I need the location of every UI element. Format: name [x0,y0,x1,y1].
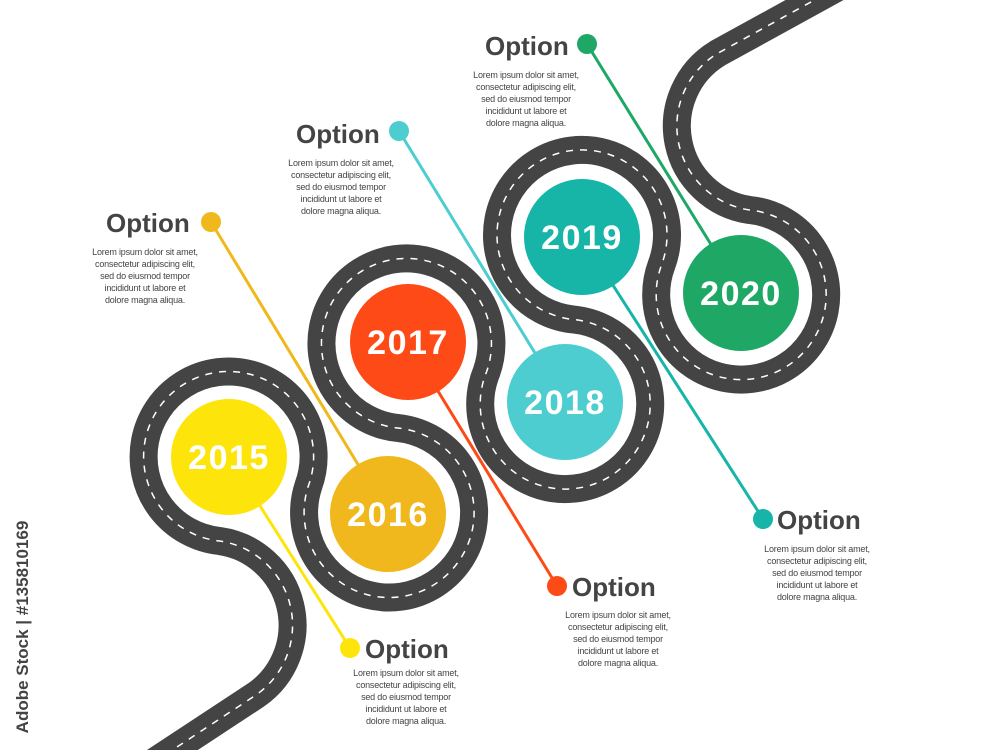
option 2018: dolore magna aliqua. [301,206,381,216]
option 2017: incididunt ut labore et [578,646,659,656]
option 2019: dolore magna aliqua. [777,592,857,602]
option 2019: sed do eiusmod tempor [772,568,862,578]
option 2015: consectetur adipiscing elit, [356,680,456,690]
option 2016: Option [106,208,190,238]
option 2015: incididunt ut labore et [366,704,447,714]
option 2016: Lorem ipsum dolor sit amet, [92,247,198,257]
circle 2020 [683,235,799,351]
option 2018 [288,119,409,216]
option 2020: consectetur adipiscing elit, [476,82,576,92]
option 2020: Option [485,31,569,61]
circle 2018 [507,344,623,460]
option 2015 [340,634,459,726]
option 2020: Lorem ipsum dolor sit amet, [473,70,579,80]
circle 2016 [330,456,446,572]
watermark id: Adobe Stock | #135810169 [13,521,32,733]
option 2018: consectetur adipiscing elit, [291,170,391,180]
circle 2015 [171,399,287,515]
circle 2016: 2016 [347,496,429,534]
option 2019 [753,505,870,602]
option 2019: consectetur adipiscing elit, [767,556,867,566]
circle 2017: 2017 [367,324,449,362]
circle 2018: 2018 [524,384,606,422]
option 2020: dolore magna aliqua. [486,118,566,128]
option 2016: consectetur adipiscing elit, [95,259,195,269]
circle 2017 [350,284,466,400]
circle 2019: 2019 [541,219,623,257]
option 2018: sed do eiusmod tempor [296,182,386,192]
option 2017 [547,572,671,668]
option 2015: sed do eiusmod tempor [361,692,451,702]
circle 2019 [524,179,640,295]
option 2015: dolore magna aliqua. [366,716,446,726]
option 2020 [473,31,597,128]
option 2019: Option [777,505,861,535]
circle 2015: 2015 [188,439,270,477]
option 2016: sed do eiusmod tempor [100,271,190,281]
option 2019: incididunt ut labore et [777,580,858,590]
option 2020: incididunt ut labore et [486,106,567,116]
connector lines [211,44,763,648]
option 2018: incididunt ut labore et [301,194,382,204]
road [142,0,860,750]
circle 2020: 2020 [700,275,782,313]
option 2018: Lorem ipsum dolor sit amet, [288,158,394,168]
option 2015: Option [365,634,449,664]
option 2019: Lorem ipsum dolor sit amet, [764,544,870,554]
option 2017: dolore magna aliqua. [578,658,658,668]
option 2020: sed do eiusmod tempor [481,94,571,104]
option 2017: sed do eiusmod tempor [573,634,663,644]
option 2016: incididunt ut labore et [105,283,186,293]
option 2017: Option [572,572,656,602]
option 2018: Option [296,119,380,149]
option 2017: Lorem ipsum dolor sit amet, [565,610,671,620]
option 2016: dolore magna aliqua. [105,295,185,305]
option 2017: consectetur adipiscing elit, [568,622,668,632]
option 2015: Lorem ipsum dolor sit amet, [353,668,459,678]
option 2016 [92,208,221,305]
